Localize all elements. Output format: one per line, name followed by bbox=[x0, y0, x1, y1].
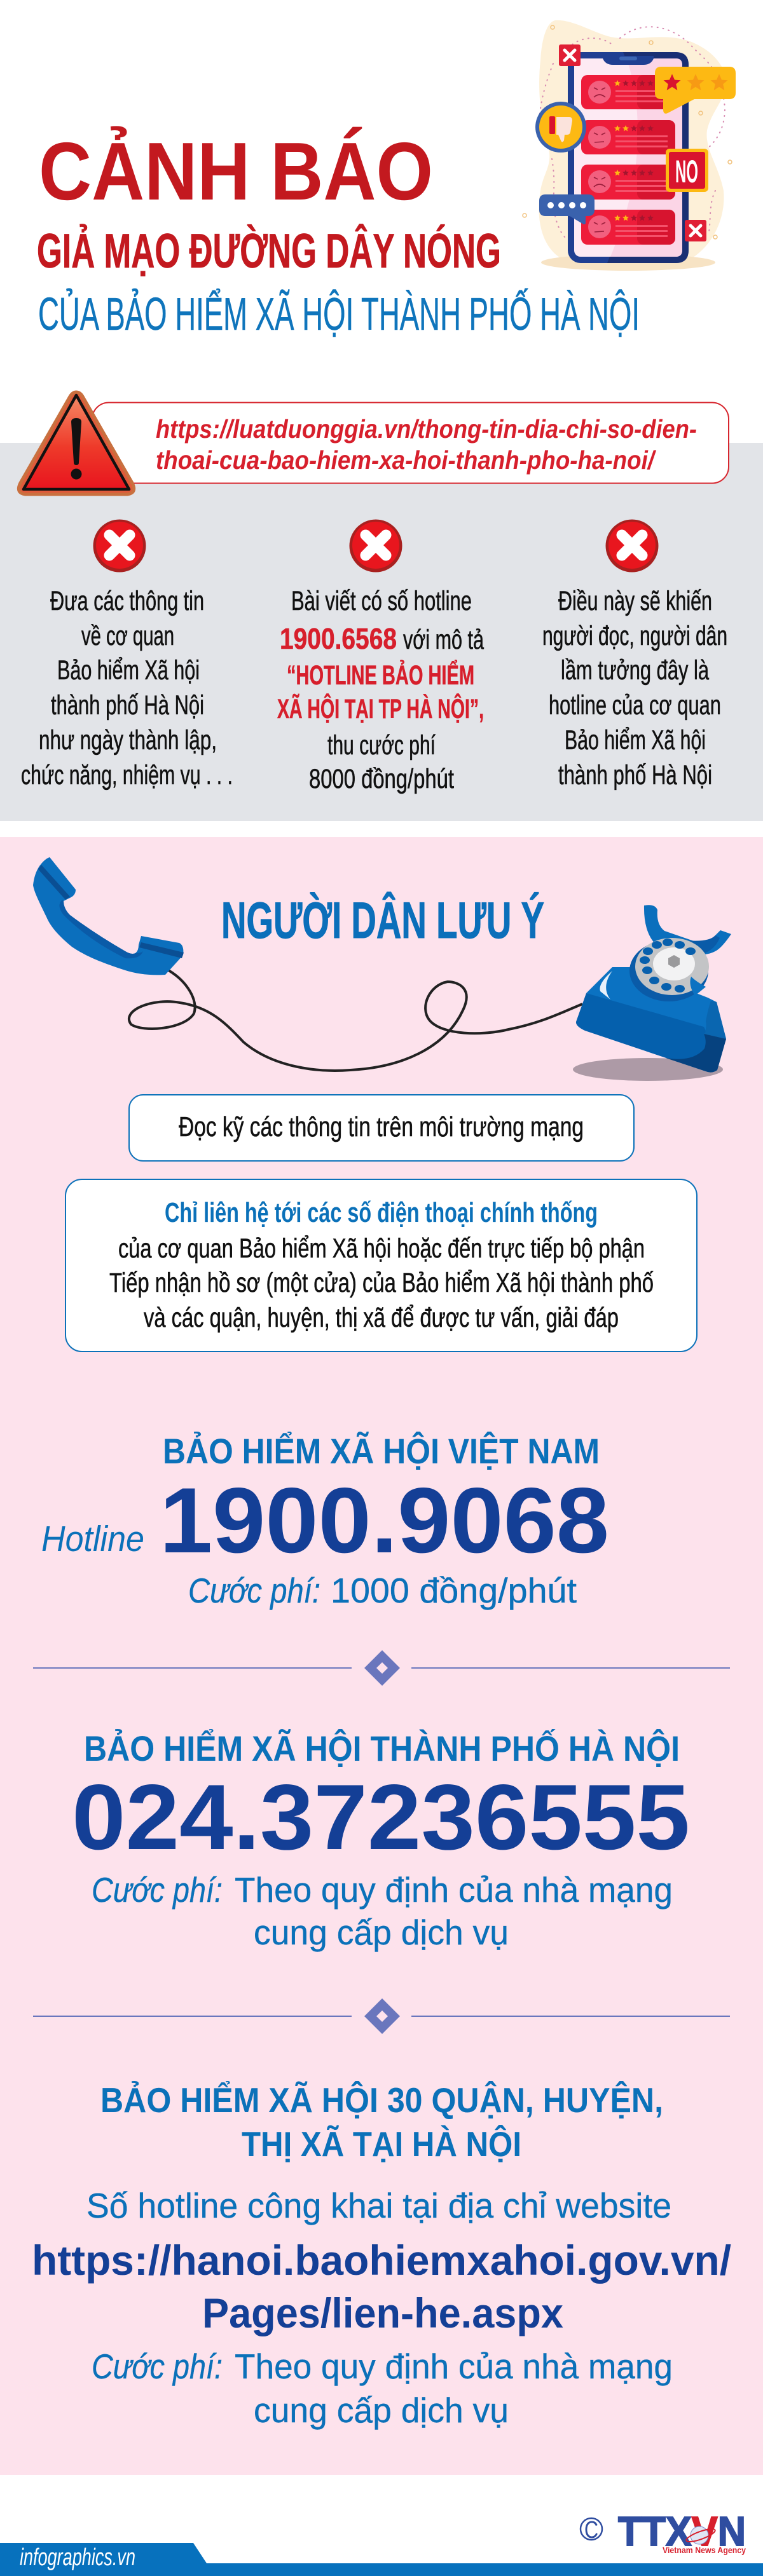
icon: rotary telephone bbox=[573, 905, 731, 1081]
contact block: Bảo hiểm Xã hội Hà Nội: cung cấp dịch vụ bbox=[254, 1913, 509, 1952]
divider 1 bbox=[33, 1650, 730, 1686]
text column 1 bbox=[21, 586, 233, 790]
text column 3: lầm tưởng đây là bbox=[561, 655, 709, 686]
phone body bbox=[568, 52, 689, 263]
panel: grey warning panel bbox=[0, 392, 763, 821]
review card 3 bbox=[581, 165, 675, 200]
text column 1: Bảo hiểm Xã hội bbox=[57, 655, 200, 686]
contact block: 30 quận huyện thị xã: Theo quy định của nhà mạng bbox=[235, 2347, 673, 2386]
contact block: Bảo hiểm Xã hội Hà Nội: Theo quy định của nhà mạng bbox=[235, 1870, 673, 1909]
text column 1: Đưa các thông tin bbox=[50, 586, 204, 616]
telephone cord bbox=[129, 970, 582, 1071]
logo: TTXVN: Vietnam News Agency bbox=[663, 2545, 746, 2555]
heading: người dân lưu ý: NGƯỜI DÂN LƯU Ý bbox=[221, 891, 544, 949]
footer band bbox=[0, 2543, 763, 2576]
contact block: 30 quận huyện thị xã: cung cấp dịch vụ bbox=[254, 2390, 509, 2430]
contact block: Bảo hiểm Xã hội Việt Nam bbox=[41, 1431, 609, 1610]
contact block: 30 quận huyện thị xã: https://hanoi.baohiemxahoi.gov.vn/ bbox=[32, 2237, 731, 2284]
icon: red cross 3 bbox=[605, 520, 659, 572]
icon: warning triangle bbox=[18, 392, 134, 494]
callout: contact official numbers: và các quận, huyện, thị xã để được tư vấn, giải đáp bbox=[144, 1303, 619, 1333]
divider 2 bbox=[33, 1998, 730, 2034]
logo: TTXVN: C bbox=[584, 2517, 598, 2544]
text column 1: như ngày thành lập, bbox=[39, 725, 217, 756]
contact block: Bảo hiểm Xã hội Việt Nam: Hotline bbox=[41, 1519, 144, 1559]
subtitle: giả mạo đường dây nóng: GIẢ MẠO ĐƯỜNG DÂY NÓNG bbox=[37, 224, 501, 278]
text column 2: với mô tả bbox=[403, 625, 484, 655]
logo: TTXVN: TTXVN bbox=[618, 2508, 746, 2554]
contact block: Bảo hiểm Xã hội Hà Nội: Cước phí: bbox=[92, 1870, 223, 1909]
text column 2 bbox=[277, 586, 484, 794]
panel: pink advice panel bbox=[0, 837, 763, 2475]
badge: X top bbox=[559, 44, 581, 66]
text column 2: 1900.6568 bbox=[280, 622, 397, 655]
icon: red cross 1 bbox=[93, 520, 146, 572]
icon: red cross 2 bbox=[350, 520, 402, 572]
speech bubble: star rating bbox=[655, 67, 736, 114]
text column 2: 8000 đồng/phút bbox=[309, 764, 454, 794]
phone screen bbox=[574, 58, 682, 257]
text column 1: thành phố Hà Nội bbox=[51, 690, 204, 721]
text column 3: Bảo hiểm Xã hội bbox=[565, 725, 706, 756]
text column 1: chức năng, nhiệm vụ . . . bbox=[21, 760, 233, 790]
contact block: 30 quận huyện thị xã: BẢO HIỂM XÃ HỘI 30 QUẬN, HUYỆN, bbox=[100, 2080, 663, 2120]
contact block: 30 quận huyện thị xã: Pages/lien-he.aspx bbox=[202, 2289, 563, 2336]
badge: NO: NO bbox=[675, 154, 698, 189]
callout: contact official numbers: Chỉ liên hệ tới các số điện thoại chính thống bbox=[165, 1197, 598, 1228]
review card 2 bbox=[581, 120, 675, 154]
text column 1: về cơ quan bbox=[81, 621, 174, 651]
contact block: Bảo hiểm Xã hội Việt Nam: BẢO HIỂM XÃ HỘI VIỆT NAM bbox=[163, 1431, 600, 1471]
contact block: Bảo hiểm Xã hội Hà Nội: 024.37236555 bbox=[72, 1765, 690, 1869]
callout: contact official numbers bbox=[65, 1179, 697, 1352]
contact block: Bảo hiểm Xã hội Hà Nội: BẢO HIỂM XÃ HỘI THÀNH PHỐ HÀ NỘI bbox=[84, 1728, 680, 1768]
review card 4 bbox=[581, 210, 675, 245]
text column 2: Bài viết có số hotline bbox=[291, 586, 472, 616]
icon: telephone receiver bbox=[33, 857, 184, 975]
review card 1 bbox=[581, 75, 675, 109]
footer band: infographics.vn bbox=[20, 2544, 135, 2571]
header title block bbox=[37, 125, 640, 340]
contact block: 30 quận huyện thị xã bbox=[32, 2080, 731, 2430]
callout: read information carefully: Đọc kỹ các thông tin trên môi trường mạng bbox=[179, 1111, 584, 1142]
callout: read information carefully bbox=[129, 1095, 634, 1161]
contact block: 30 quận huyện thị xã: Số hotline công khai tại địa chỉ website bbox=[86, 2186, 671, 2225]
contact block: Bảo hiểm Xã hội Việt Nam: Cước phí: bbox=[188, 1571, 320, 1610]
contact block: Bảo hiểm Xã hội Hà Nội bbox=[72, 1728, 690, 1952]
speech bubble: typing dots bbox=[539, 194, 595, 224]
text column 2: XÃ HỘI TẠI TP HÀ NỘI”, bbox=[277, 693, 484, 724]
text column 2: “HOTLINE BẢO HIỂM bbox=[287, 660, 474, 691]
contact block: Bảo hiểm Xã hội Việt Nam: 1900.9068 bbox=[160, 1468, 609, 1572]
contact block: Bảo hiểm Xã hội Việt Nam: 1000 đồng/phút bbox=[331, 1571, 577, 1610]
text column 2: thu cước phí bbox=[327, 730, 436, 761]
source URL box bbox=[92, 403, 729, 483]
illustration: smartphone with bad reviews bbox=[523, 20, 736, 271]
title: Cảnh báo: CẢNH BÁO bbox=[39, 125, 433, 217]
source URL box: thoai-cua-bao-hiem-xa-hoi-thanh-pho-ha-noi/ bbox=[156, 445, 656, 475]
text column 3 bbox=[542, 586, 727, 790]
badge: thumbs down bbox=[535, 102, 586, 153]
badge: X bottom bbox=[685, 220, 706, 241]
contact block: 30 quận huyện thị xã: Cước phí: bbox=[92, 2347, 223, 2386]
badge: NO bbox=[666, 149, 708, 192]
source URL box: https://luatduonggia.vn/thong-tin-dia-chi-so-dien- bbox=[156, 414, 697, 444]
contact block: 30 quận huyện thị xã: THỊ XÃ TẠI HÀ NỘI bbox=[242, 2124, 521, 2164]
